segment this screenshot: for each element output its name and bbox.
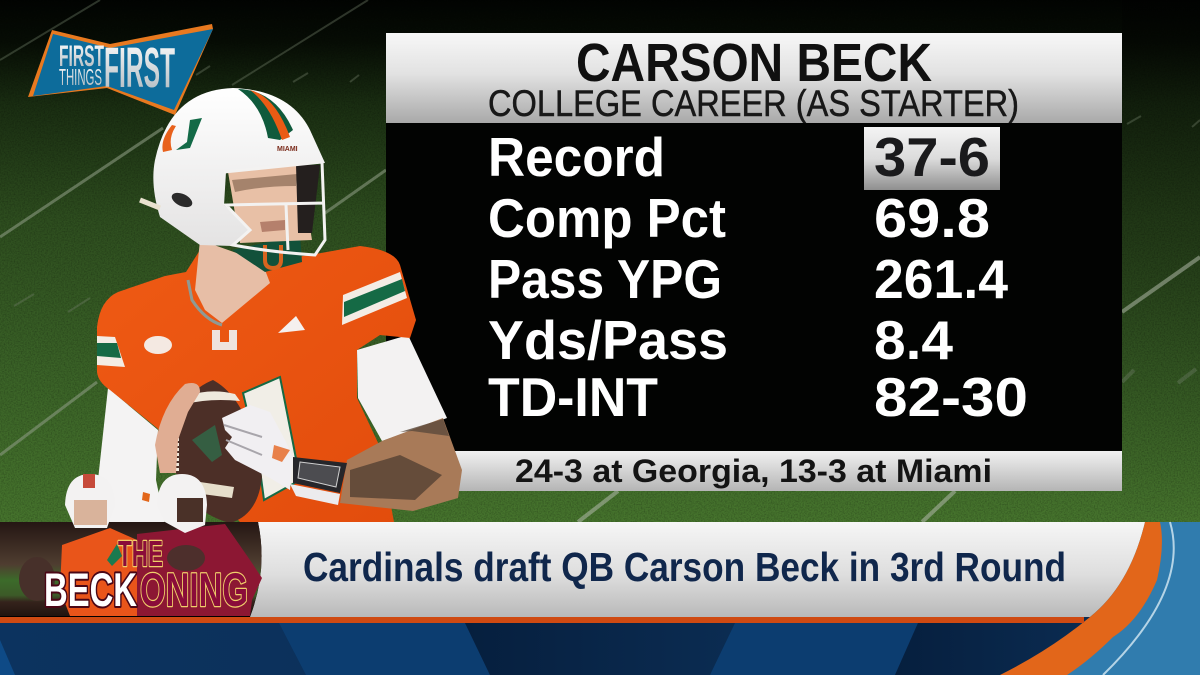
logo: First Things First: THINGS [59,64,102,90]
facemask [224,162,325,255]
glove [222,405,293,490]
panel header: CARSON BECK [576,33,932,93]
left sleeve [98,388,165,523]
panel header: COLLEGE CAREER (AS STARTER) [488,83,1019,124]
title text [44,533,248,616]
panel body [386,123,1122,451]
logo: First Things First: FIRST [104,36,175,100]
football field background [0,0,1200,522]
orange jersey [97,246,416,522]
helmet U logo [162,125,176,152]
helmet stripe [238,89,293,140]
td-int: 82-30 [874,366,1028,428]
football [170,380,262,523]
helmet wordmark: MIAMI [277,146,298,153]
comp pct: 69.8 [874,187,990,249]
panel footer [386,451,1122,491]
headline bar: Cardinals draft QB Carson Beck in 3rd Round [303,544,1066,590]
forearm [340,418,462,511]
jersey badges [144,336,172,354]
stat rows [488,126,1028,428]
orange swoosh [1000,522,1162,675]
neck [195,240,270,323]
stats panel [386,33,1122,491]
record: Record [488,126,665,188]
wristband [293,457,347,493]
title text: ONING [140,563,248,616]
helmet shell [153,88,325,246]
right blue corner [1050,522,1200,675]
record: 37-6 [874,126,990,188]
td-int [488,366,1028,428]
jersey number [243,377,300,500]
record [488,126,990,188]
small player: Arizona [137,474,262,616]
sleeve stripes [342,272,407,325]
left hand [155,383,200,473]
yards per pass: Yds/Pass [488,309,728,371]
highlight behind record [864,127,1000,190]
panel footer: 24-3 at Georgia, 13-3 at Miami [515,453,992,489]
face [228,165,312,243]
comp pct [488,187,990,249]
lower third [0,474,1200,675]
logo: First Things First [28,24,213,115]
comp pct: Comp Pct [488,187,726,249]
yards per pass: 8.4 [874,309,953,371]
title text: THE [118,533,163,574]
yards per pass [488,309,953,371]
chin strap and collar [232,235,302,272]
logo: First Things First: FIRST [59,40,104,73]
bottom band [0,617,1200,675]
right sleeve [357,335,447,441]
headline bar [250,522,1145,617]
panel header [386,33,1122,124]
show graphic: The Beckoning [0,474,262,616]
pass ypg: Pass YPG [488,248,722,310]
title text: BECK [44,563,137,616]
pass ypg: 261.4 [874,248,1008,310]
td-int: TD-INT [488,366,658,428]
small player: Miami [19,474,137,616]
player: quarterback in orange jersey [97,88,462,523]
orange rule [0,617,1084,623]
pass ypg [488,248,1008,310]
